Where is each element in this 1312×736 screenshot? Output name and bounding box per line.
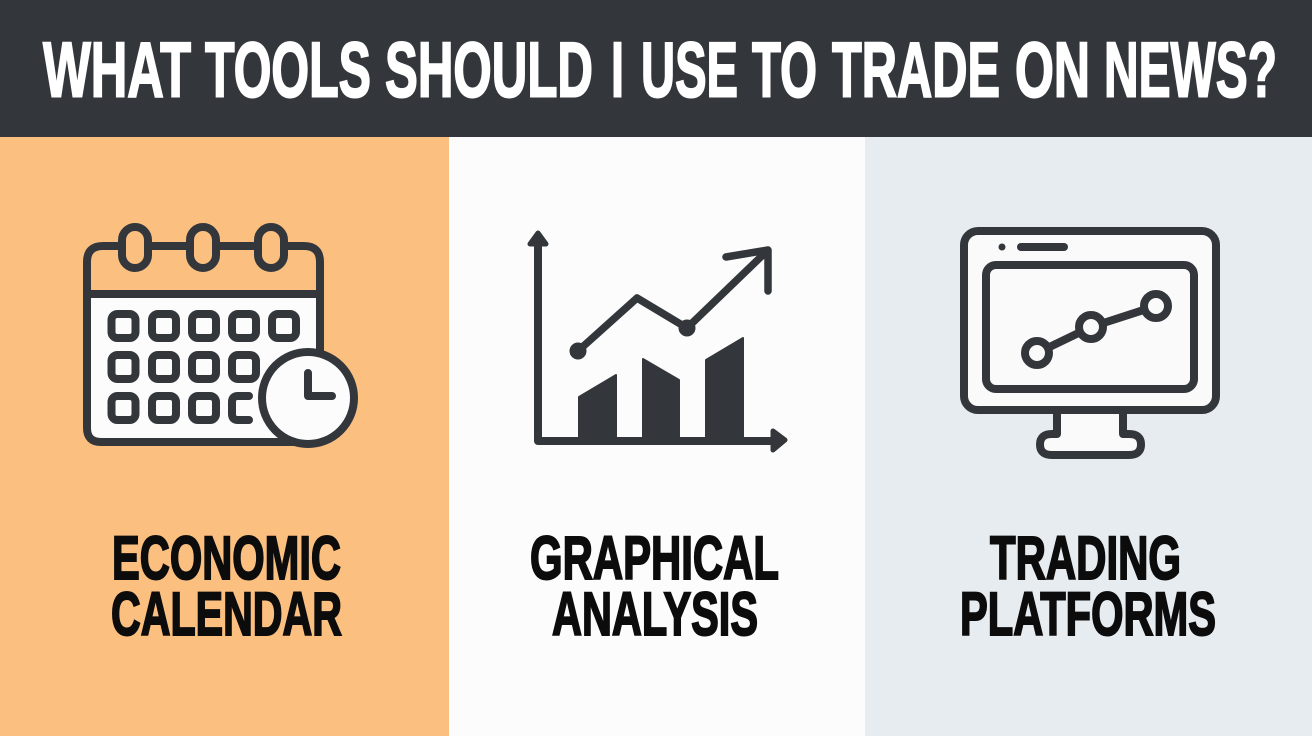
title: TO [752,26,817,114]
header band [0,0,1312,137]
label: economic calendar [111,524,342,648]
title: I [611,26,624,114]
label: economic calendar: ECONOMIC [112,524,341,592]
title: USE [641,26,738,114]
label: graphical analysis: ANALYSIS [552,580,758,648]
icon: monitor with line chart [964,231,1216,455]
title: TRADE [832,26,1000,114]
label: trading platforms: TRADING [990,524,1181,592]
title: TOOLS [205,26,371,114]
label: trading platforms [960,524,1216,648]
title: SHOULD [385,26,593,114]
title: WHAT [43,26,191,114]
panel: economic calendar [0,137,449,736]
panel: trading platforms [865,137,1312,736]
icon: chart with arrow [530,233,785,450]
icon: calendar with clock [87,227,354,444]
label: graphical analysis [530,524,779,648]
label: graphical analysis: GRAPHICAL [530,524,779,592]
panel: graphical analysis [449,137,865,736]
label: economic calendar: CALENDAR [111,580,342,648]
title [43,26,1277,114]
title: ON [1015,26,1090,114]
